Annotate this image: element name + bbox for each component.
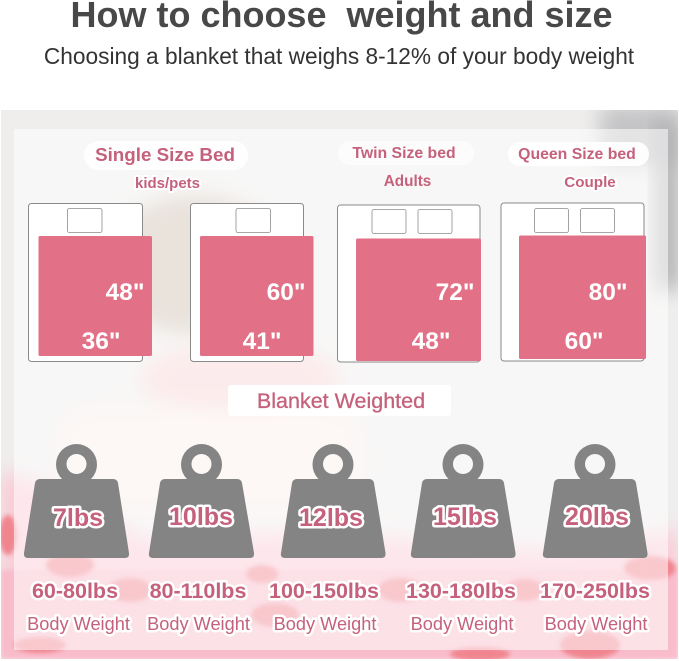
weight: 20lbs: 20lbs — [565, 503, 629, 531]
body weight label: 80-110lbs — [147, 579, 250, 634]
heading: twin size: Twin Size bed — [352, 145, 456, 162]
heading: single size: Single Size Bed — [95, 144, 235, 165]
translucent panel — [14, 129, 668, 650]
weight: 15lbs: 15lbs — [433, 503, 497, 531]
body weight label: 60-80lbs — [27, 579, 130, 634]
heading: blanket weighted: Blanket Weighted — [257, 389, 425, 413]
bed: 72 by 48 — [338, 205, 481, 362]
weight: 10lbs: 10lbs — [169, 503, 233, 531]
heading: blanket weighted — [228, 385, 451, 416]
heading: twin size: Adults — [384, 173, 431, 190]
weight: 7lbs: 7lbs — [53, 504, 103, 532]
bed: 80 by 60: 60" — [565, 328, 603, 355]
bed: 60 by 41: 60" — [267, 279, 305, 306]
body weight label: 100-150lbs — [269, 579, 379, 634]
heading: single size: kids/pets — [135, 175, 200, 192]
bed: 80 by 60: 80" — [589, 279, 627, 306]
bed: 60 by 41: 41" — [243, 328, 281, 355]
body weight label: 170-250lbs: Body Weight — [545, 614, 647, 634]
body weight label: 170-250lbs: 170-250lbs — [540, 579, 650, 603]
body weight label: 130-180lbs: 130-180lbs — [406, 579, 516, 603]
heading: queen size — [508, 142, 649, 191]
subtitle: Choosing a blanket that weighs 8-12% of your body weight — [44, 43, 635, 69]
bed: 80 by 60 — [501, 203, 646, 361]
body weight label: 100-150lbs: Body Weight — [274, 614, 376, 634]
heading: queen size: Couple — [564, 174, 616, 191]
heading: queen size: Queen Size bed — [518, 146, 636, 163]
weight: 15lbs — [411, 444, 516, 558]
bed: 48 by 36 — [28, 204, 152, 362]
weight: 20lbs — [543, 444, 648, 558]
body weight label: 130-180lbs: Body Weight — [411, 614, 513, 634]
bed: 60 by 41 — [190, 204, 314, 362]
bed: 72 by 48: 48" — [412, 328, 450, 355]
weight: 10lbs — [149, 444, 254, 558]
weight: 12lbs: 12lbs — [299, 504, 363, 532]
body weight label: 60-80lbs: 60-80lbs — [32, 579, 118, 603]
bed: 48 by 36: 48" — [106, 279, 144, 306]
body weight label: 100-150lbs: 100-150lbs — [269, 579, 379, 603]
heading: twin size — [338, 141, 474, 190]
body weight label: 80-110lbs: 80-110lbs — [150, 579, 246, 603]
body weight label: 60-80lbs: Body Weight — [27, 614, 130, 634]
body weight label: 130-180lbs — [406, 579, 516, 634]
bed: 48 by 36: 36" — [82, 328, 120, 355]
body weight label: 80-110lbs: Body Weight — [147, 614, 250, 634]
heading: single size — [84, 141, 248, 192]
bed: 72 by 48: 72" — [436, 279, 474, 306]
weight: 7lbs — [24, 444, 129, 558]
body weight label: 170-250lbs — [540, 579, 650, 634]
weight: 12lbs — [281, 444, 386, 558]
